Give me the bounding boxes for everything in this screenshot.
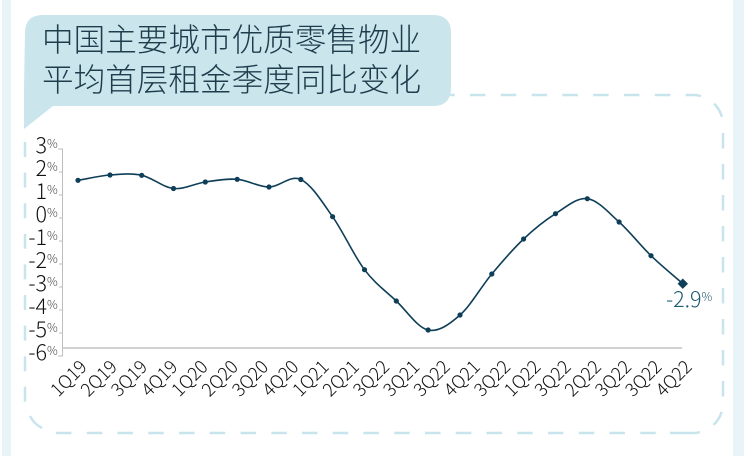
left side band xyxy=(2,0,11,456)
x axis labels: 2Q21 xyxy=(316,354,364,402)
x axis labels: 1Q21 xyxy=(286,354,334,402)
x axis labels: 4Q22 xyxy=(649,354,697,402)
x axis labels: 3Q22 xyxy=(347,354,395,402)
y axis labels: % xyxy=(47,319,58,336)
y axis labels: % xyxy=(47,227,58,244)
x axis labels: 3Q21 xyxy=(377,354,425,402)
y axis labels: % xyxy=(47,158,58,175)
y axis labels: % xyxy=(47,342,58,359)
x axis labels: 3Q20 xyxy=(226,354,274,402)
y axis labels: -6 xyxy=(28,336,47,367)
x axis labels: 2Q19 xyxy=(74,354,122,402)
title xyxy=(42,15,421,101)
x axis labels: 4Q20 xyxy=(256,354,304,402)
y axis labels: -3 xyxy=(28,267,47,298)
y axis labels: -5 xyxy=(28,313,47,344)
x axis labels: 3Q22 xyxy=(528,354,576,402)
x axis labels: 4Q19 xyxy=(135,354,183,402)
y axis labels: 1 xyxy=(35,175,47,206)
y axis labels: -1 xyxy=(28,221,47,252)
x axis labels: 3Q22 xyxy=(407,354,455,402)
x axis labels: 1Q19 xyxy=(44,354,92,402)
y axis labels: % xyxy=(47,250,58,267)
title speech bubble xyxy=(24,15,451,129)
y axis labels: 0 xyxy=(35,198,47,229)
final value label: % xyxy=(702,288,712,305)
x axis labels: 2Q20 xyxy=(195,354,243,402)
x axis labels: 1Q22 xyxy=(498,354,546,402)
y axis labels: -2 xyxy=(28,244,47,275)
y axis labels: % xyxy=(47,273,58,290)
x axis labels: 3Q22 xyxy=(589,354,637,402)
title: 平均首层租金季度同比变化 xyxy=(42,55,421,101)
y axis labels: 2 xyxy=(35,152,47,183)
x axis labels: 2Q22 xyxy=(558,354,606,402)
y axis labels: -4 xyxy=(28,290,47,321)
y axis labels: 3 xyxy=(35,129,47,160)
line chart xyxy=(75,172,688,333)
x axis labels: 4Q21 xyxy=(437,354,485,402)
y axis labels: % xyxy=(47,135,58,152)
y axis xyxy=(58,149,62,356)
x axis xyxy=(62,347,682,349)
y axis labels xyxy=(28,129,58,367)
y axis labels: % xyxy=(47,181,58,198)
x axis labels: 3Q19 xyxy=(105,354,153,402)
x axis labels: 3Q22 xyxy=(619,354,667,402)
x axis labels: 1Q20 xyxy=(165,354,213,402)
x axis labels: 3Q22 xyxy=(468,354,516,402)
dashed panel border xyxy=(25,95,723,433)
title: 中国主要城市优质零售物业 xyxy=(42,15,421,61)
right side band xyxy=(733,0,744,456)
final value label: -2.9 xyxy=(666,283,702,314)
y axis labels: % xyxy=(47,296,58,313)
x axis labels xyxy=(44,354,697,402)
y axis labels: % xyxy=(47,204,58,221)
